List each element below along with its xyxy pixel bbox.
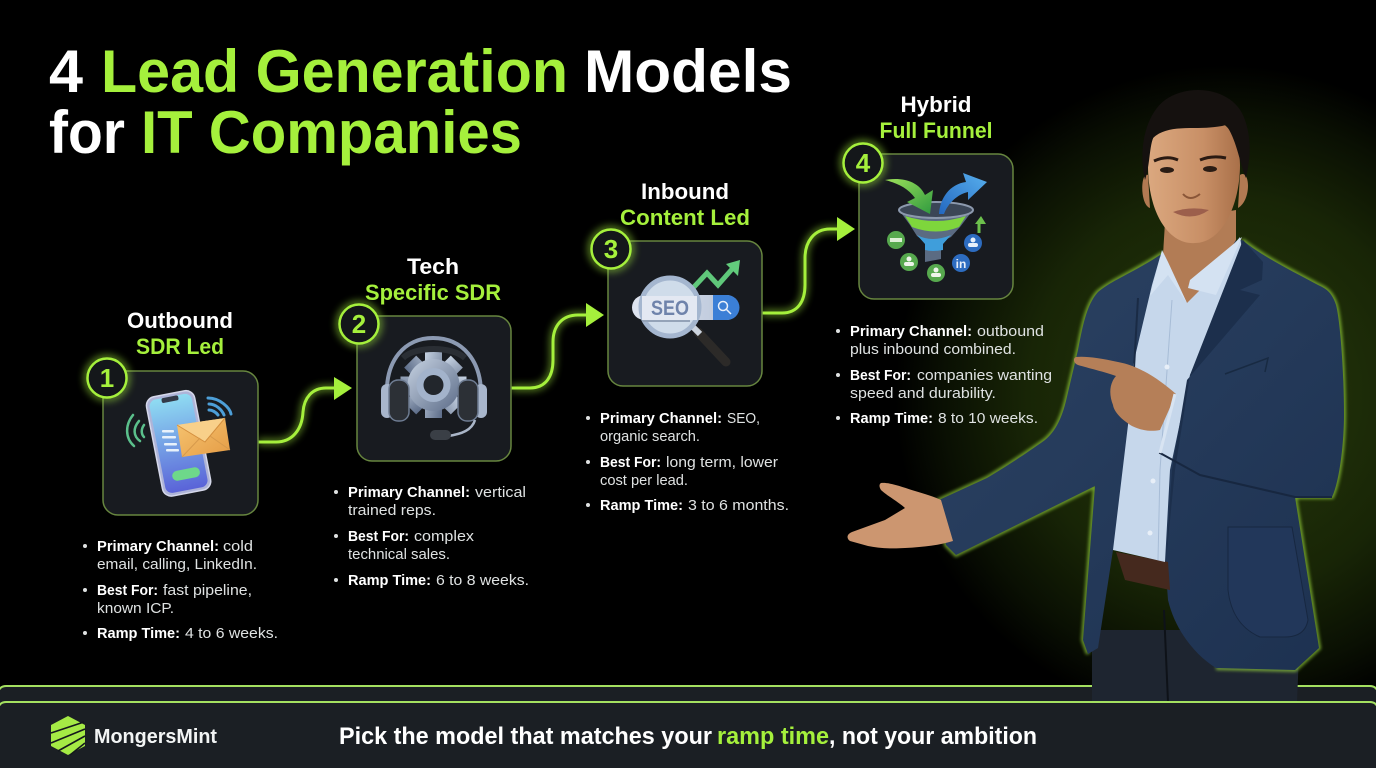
bullet list 4: 8 to 10 weeks. [938,411,1038,427]
badge 2: 2 [352,309,366,339]
presenter figure [848,90,1344,702]
trousers [1092,630,1300,702]
bullet list 4: Ramp Time: [850,411,933,427]
bullet list 2: complex [414,529,475,545]
bullet list 1: email, calling, LinkedIn. [97,557,257,573]
badge 1 [87,358,127,398]
jacket lapel [1166,240,1263,560]
jacket rim glow [939,240,1344,670]
bullet list 4: outbound [977,324,1044,340]
title: for [49,99,125,166]
heading: hybrid full funnel: Hybrid [900,92,972,117]
heading: tech specific SDR [365,254,501,305]
ears [1142,174,1248,208]
card 4 [859,154,1013,299]
tagline: , not your ambition [829,723,1037,750]
panel: step 2 tech [334,254,529,589]
icon: gear headset [381,338,487,440]
bullet list 4: Primary Channel: [850,324,972,340]
bullet list 3: 3 to 6 months. [688,498,789,514]
bullet list 1: Primary Channel: [97,539,219,555]
bullet list 2: technical sales. [348,547,450,563]
logo: MongersMint: MongersMint [94,726,217,748]
bullet list 2: Best For: [348,529,409,545]
bullet list 3: long term, lower [666,455,778,471]
heading: tech specific SDR: Specific SDR [365,280,501,305]
bullet list 4: Best For: [850,368,911,384]
arrow: step 3 to step 4 [762,217,855,313]
heading: hybrid full funnel: Full Funnel [880,118,992,143]
tagline: ramp time [717,723,829,750]
bullet list 2: Ramp Time: [348,573,431,589]
icon: SEO magnifier [632,260,740,362]
bullet list 3: SEO, [727,411,760,427]
badge 4: 4 [856,148,871,178]
heading: outbound SDR led: SDR Led [136,334,224,359]
heading: outbound SDR led [127,308,233,359]
heading: tech specific SDR: Tech [407,254,459,279]
tagline [339,723,1037,750]
title: 4 [49,38,84,105]
bullet list 4: plus inbound combined. [850,342,1016,358]
bullet list 2 [334,485,529,589]
shirt cuff [1160,394,1175,453]
jacket [939,240,1344,670]
logo: MongersMint [51,716,217,755]
arrow: step 2 to step 3 [511,303,604,388]
bullet list 1 [83,539,278,642]
bullet list 1: Best For: [97,583,158,599]
heading: hybrid full funnel [880,92,992,143]
arrow: step 1 to step 2 [258,377,352,442]
bullet list 2: 6 to 8 weeks. [436,573,529,589]
title: Models [584,38,792,105]
bullet list 2: Primary Channel: [348,485,470,501]
panel: step 4 hybrid [836,92,1052,427]
pointing hand [1074,357,1176,431]
tagline: Pick the model that matches your [339,723,712,750]
panel: step 3 inbound [586,179,789,514]
bullet list 4 [836,324,1052,427]
title: IT Companies [141,99,522,166]
bullet list 3: Ramp Time: [600,498,683,514]
badge 1: 1 [100,363,114,393]
icon: funnel with arrows: in [956,257,966,271]
bullet list 1: known ICP. [97,601,174,617]
heading: inbound content led [620,179,750,230]
bullet list 2: trained reps. [348,503,436,519]
footer bar [0,702,1376,768]
neck [1163,210,1236,303]
bullet list 4: speed and durability. [850,386,996,402]
bullet list 1: cold [223,539,253,555]
open hand [848,483,953,548]
bullet list 3: Best For: [600,455,661,471]
bullet list 4: companies wanting [917,368,1052,384]
shirt [1113,237,1243,562]
bullet list 1: fast pipeline, [163,583,252,599]
icon: phone with envelope [127,389,231,498]
footer back bar [0,686,1376,768]
heading: inbound content led: Content Led [620,205,750,230]
title [49,38,792,166]
bullet list 3: cost per lead. [600,473,688,489]
badge 4 [843,143,883,183]
bullet list 2: vertical [475,485,526,501]
bullet list 1: Ramp Time: [97,626,180,642]
badge 3 [591,229,631,269]
bullet list 3 [586,411,789,514]
face [1148,115,1240,243]
panel: step 1 outbound [83,308,278,642]
title: Lead Generation [101,38,568,105]
card 1 [103,371,258,515]
badge 3: 3 [604,234,618,264]
facial features [1154,157,1226,217]
card 3 [608,241,762,386]
bullet list 3: organic search. [600,429,700,445]
hair [1142,90,1250,180]
heading: outbound SDR led: Outbound [127,308,233,333]
icon: SEO magnifier: SEO [651,297,689,320]
card 2 [357,316,511,461]
icon: funnel with arrows [885,173,987,282]
shirt placket and buttons [1148,300,1172,560]
belt [1116,552,1170,590]
badge 2 [339,304,379,344]
heading: inbound content led: Inbound [641,179,729,204]
bullet list 3: Primary Channel: [600,411,722,427]
bullet list 1: 4 to 6 weeks. [185,626,278,642]
sleeve shadow [1160,394,1332,497]
collar [1150,237,1242,303]
